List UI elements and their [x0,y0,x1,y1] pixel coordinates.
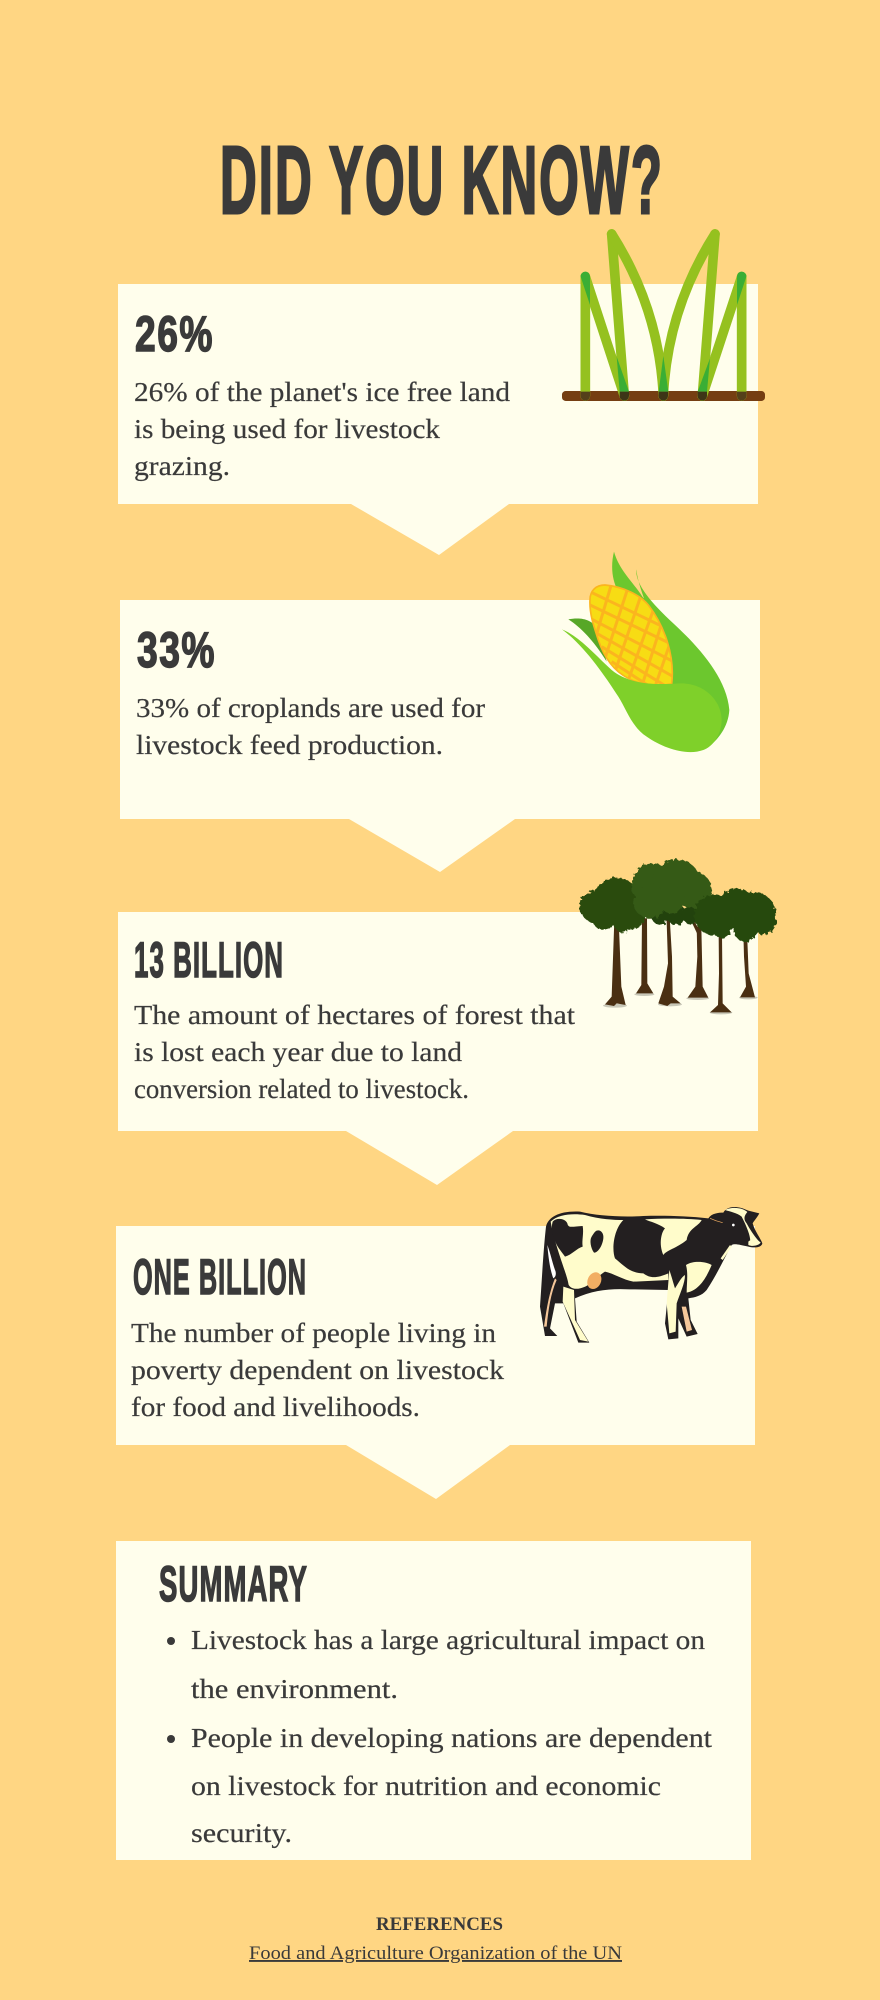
text: 33% description: livestock feed production. [136,730,443,760]
panel: summary [116,1541,751,1860]
text: forest description: The amount of hectares of forest that [134,1000,576,1030]
bullet 2: on livestock for nutrition and economic [191,1771,661,1801]
heading: one billion: ONE BILLION [133,1249,307,1305]
bullet 1: Livestock has a large agricultural impact on [191,1625,706,1655]
references: Food and Agriculture Organization of the UN [249,1943,622,1964]
bullet 2: People in developing nations are dependent [191,1723,713,1753]
heading: 13 billion: 13 BILLION [134,932,284,988]
references: REFERENCES [376,1914,503,1935]
icon: cow [540,1207,762,1343]
panel: 13 billion [118,859,776,1185]
references [249,1914,622,1964]
panel: 26% land [118,234,765,555]
text: forest description [134,1000,576,1104]
text: 33% description [136,693,485,760]
text: 26% description [134,377,511,481]
text: forest description: conversion related to livestock. [134,1074,469,1104]
card background [116,1541,751,1860]
text: 26% description: grazing. [134,451,230,481]
text: poverty description: The number of people living in [131,1318,497,1348]
text: forest description: is lost each year due to land [134,1037,463,1067]
text: poverty description [131,1318,505,1422]
text: poverty description: for food and livelihoods. [131,1392,420,1422]
text: 33% description: 33% of croplands are used for [136,693,485,723]
icon: grass [562,234,765,401]
icon: trees [580,859,776,1014]
heading: summary: SUMMARY [159,1556,308,1612]
heading: 26%: 26% [135,306,214,362]
card background with arrow [120,600,760,872]
card background with arrow [116,1226,755,1499]
card background with arrow [118,912,758,1185]
text: 26% description: 26% of the planet's ice free land [134,377,511,407]
panel: 33% croplands [120,552,760,872]
bullet 2: security. [191,1818,292,1848]
panel: one billion [116,1207,762,1499]
bullet 1: the environment. [191,1674,398,1704]
icon: corn [562,552,729,752]
text: 26% description: is being used for livestock [134,414,441,444]
bullet 1 [167,1625,706,1704]
heading: 33%: 33% [137,622,216,678]
bullet 2 [167,1723,713,1848]
card background with arrow [118,284,758,555]
text: poverty description: poverty dependent on livestock [131,1355,505,1385]
